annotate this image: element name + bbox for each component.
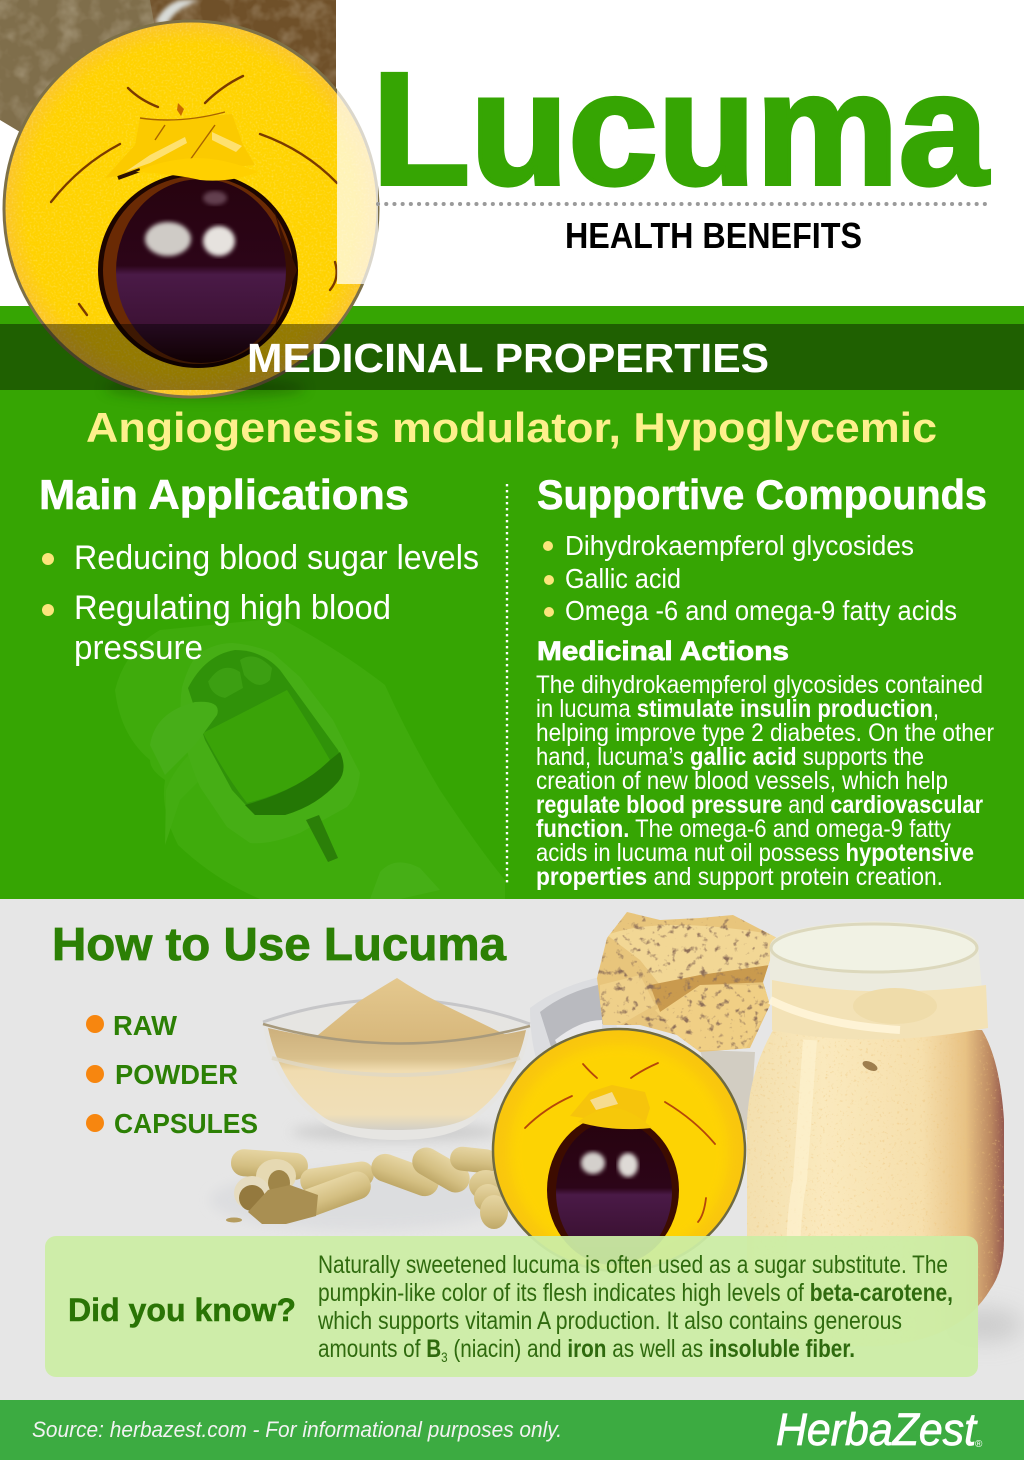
medicinal actions text: acids in lucuma nut oil possess hypotensive — [536, 839, 974, 867]
footer — [0, 1400, 1024, 1460]
image: crumbled lucuma ice cream — [595, 910, 780, 1055]
source note: Source: herbazest.com - For informational purposes only. — [32, 1417, 562, 1442]
medicinal actions heading: Medicinal Actions — [537, 636, 789, 666]
fruit seed — [98, 158, 298, 368]
image: powder bowl — [263, 978, 530, 1141]
medicinal actions text: properties and support protein creation. — [536, 863, 943, 891]
panel text: which supports vitamin A production. It also contains generous — [317, 1307, 902, 1335]
panel: did you know — [45, 1236, 978, 1377]
lower fruit core — [570, 1085, 650, 1124]
heading: Main Applications — [39, 471, 409, 518]
fruit cracks — [51, 76, 337, 315]
panel text: iron as well as insoluble fiber. — [567, 1335, 885, 1363]
bullet two: pressure — [74, 629, 203, 667]
image: second glass bowl — [530, 976, 755, 1130]
medicinal actions text: creation of new blood vessels, which help — [536, 767, 948, 795]
panel text: amounts of B — [318, 1335, 444, 1363]
panel heading: Did you know? — [68, 1292, 296, 1328]
compound list: Gallic acid — [565, 563, 681, 594]
white overlay beside fruit — [337, 22, 378, 284]
compound list: Dihydrokaempferol glycosides — [565, 530, 914, 561]
image: jar of lucuma smoothie — [745, 921, 1023, 1350]
image: halved lucuma fruit — [0, 20, 380, 400]
heading: Supportive Compounds — [537, 471, 987, 518]
medicinal actions text: The dihydrokaempferol glycosides contained — [536, 671, 983, 699]
lower fruit cracks — [525, 1063, 715, 1222]
lower fruit seed — [547, 1108, 679, 1265]
panel text: (niacin) and — [448, 1335, 567, 1363]
band: medicinal properties — [0, 324, 1024, 390]
fruit flesh — [0, 20, 380, 400]
panel text: pumpkin-like color of its flesh indicates high levels of beta-carotene, — [318, 1279, 953, 1307]
image: brown whole lucuma behind — [0, 0, 336, 132]
bullet two — [42, 589, 391, 667]
list: forms of use: RAW — [113, 1010, 178, 1041]
compound list — [543, 530, 957, 626]
logo: ® — [975, 1439, 983, 1450]
band: medicinal properties: MEDICINAL PROPERTIES — [247, 335, 769, 381]
title: Lucuma — [372, 39, 989, 218]
fruit shadow — [105, 378, 305, 398]
image: halved lucuma fruit, lower — [492, 1028, 746, 1272]
image: meter in hand — [115, 618, 505, 899]
fruit core — [105, 103, 255, 178]
subtitle: HEALTH BENEFITS — [565, 215, 862, 256]
panel text — [317, 1251, 953, 1365]
medicinal properties list: Angiogenesis modulator, Hypoglycemic — [86, 404, 937, 451]
medicinal actions text: in lucuma stimulate insulin production, — [536, 695, 939, 723]
lower fruit flesh — [492, 1028, 746, 1272]
panel text: 3 — [441, 1349, 448, 1365]
title divider — [378, 202, 986, 206]
medicinal actions text — [536, 671, 994, 891]
medicinal actions text: regulate blood pressure and cardiovascular — [536, 791, 983, 819]
medicinal actions text: function. The omega-6 and omega-9 fatty — [536, 815, 951, 843]
logo: HerbaZest — [776, 1404, 978, 1455]
heading: how to use: How to Use Lucuma — [52, 918, 506, 970]
list: forms of use — [86, 1010, 258, 1139]
image: capsules — [210, 1142, 510, 1230]
panel: supportive compounds — [536, 471, 994, 891]
list: forms of use: POWDER — [115, 1059, 238, 1090]
bullet two: Regulating high blood — [74, 589, 391, 627]
list: forms of use: CAPSULES — [114, 1108, 258, 1139]
compound list: Omega -6 and omega-9 fatty acids — [565, 595, 957, 626]
bullet one: Reducing blood sugar levels — [74, 539, 479, 577]
medicinal actions text: hand, lucuma’s gallic acid supports the — [536, 743, 924, 771]
panel: main applications — [39, 471, 479, 667]
